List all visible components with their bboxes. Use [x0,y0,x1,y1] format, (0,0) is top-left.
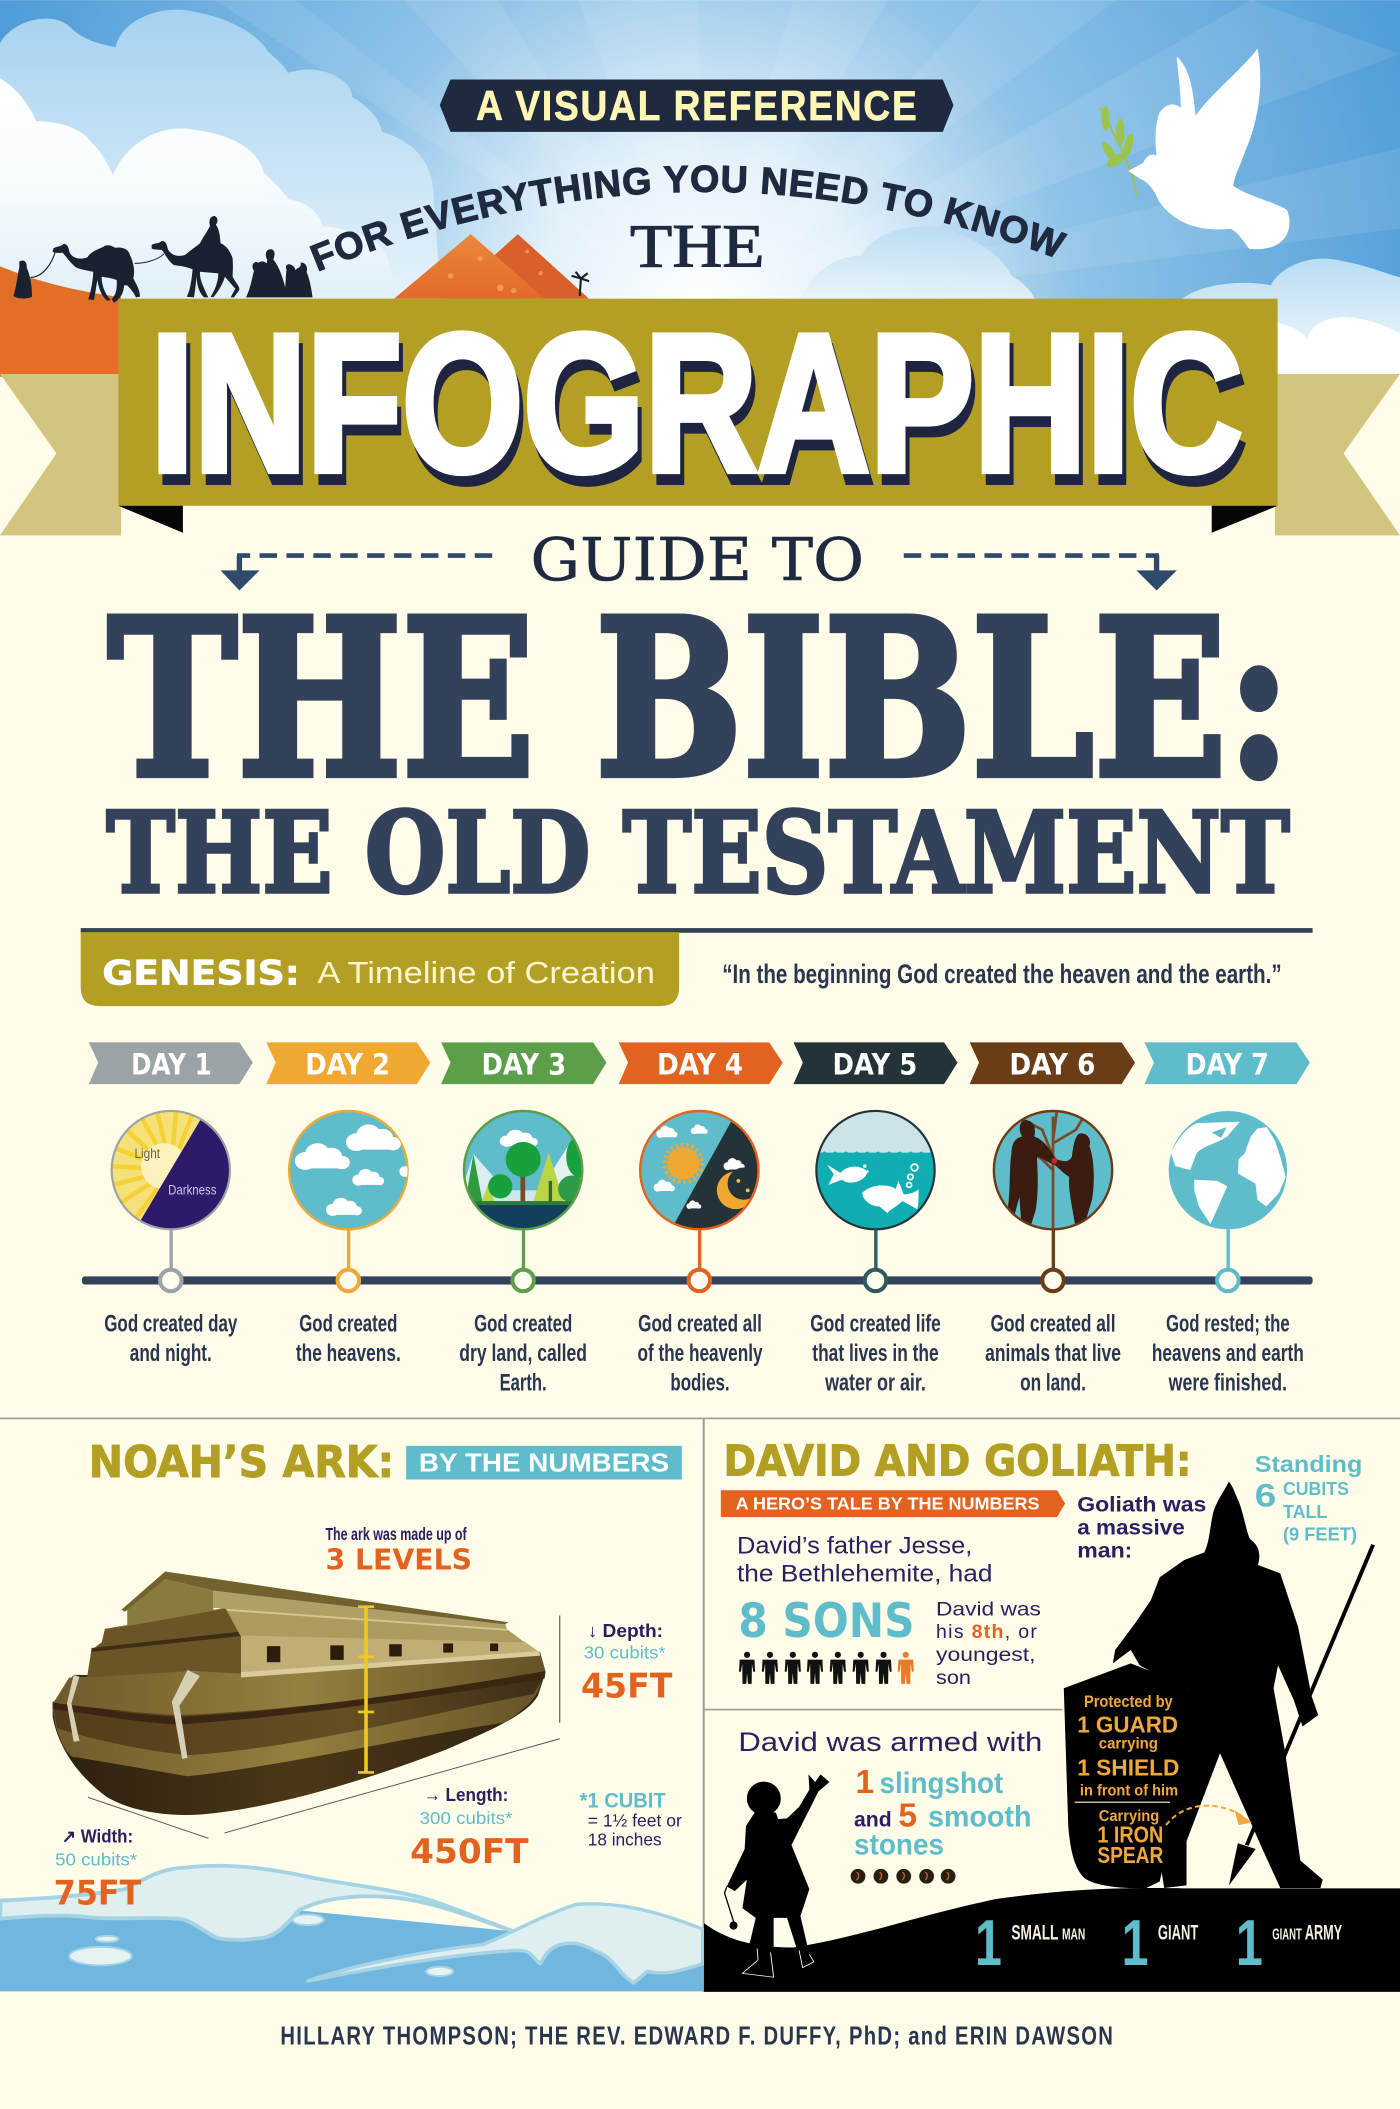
cubit note: = 1½ feet or [588,1810,682,1830]
goliath height [1255,1451,1362,1545]
shield text: 1 IRON [1097,1822,1163,1848]
shield text: in front of him [1080,1782,1178,1800]
cubit note: *1 CUBIT [580,1790,666,1813]
youngest son note: youngest, [936,1644,1036,1666]
weapons list: and [854,1807,892,1831]
caption: day 4 [637,1311,763,1397]
subtitle: guide to: GUIDE TO [531,525,864,594]
curved heading: FOR EVERYTHING YOU NEED TO KNOW [309,164,1068,272]
width measurement: 50 cubits* [55,1849,137,1869]
shield text: SPEAR [1097,1842,1164,1868]
goliath caption: a massive [1077,1517,1185,1540]
caption: day 1: and night. [130,1340,212,1367]
chevron: day 4 [619,1042,783,1084]
goliath height: Standing [1255,1451,1362,1477]
arrow: dashed right [904,556,1177,591]
jesse text [737,1532,993,1588]
caption: day 6: God created all [990,1311,1116,1338]
width measurement: ↗ Width: [62,1827,133,1847]
goliath height: 6 [1255,1477,1276,1513]
caption: day 1 [104,1311,238,1367]
shield text: 1 SHIELD [1077,1754,1179,1780]
weapons list [854,1764,1032,1862]
chevron: day 2 [266,1042,430,1084]
chevron: day 3 [441,1042,607,1084]
tally: small man giant army: 1 [1236,1907,1263,1979]
caption: day 5: that lives in the [812,1340,939,1367]
caption: day 3: dry land, called [459,1340,587,1367]
day 5 column [793,1042,958,1397]
levels callout: 3 LEVELS [325,1544,472,1577]
authors: HILLARY THOMPSON; THE REV. EDWARD F. DUFFY, PhD; and ERIN DAWSON [280,2022,1114,2050]
illustration: sun moon and stars [640,1111,767,1232]
levels callout: The ark was made up of [325,1524,467,1544]
illustration: man and woman at tree [994,1110,1112,1235]
title word: the: THE [630,212,765,280]
goliath height: CUBITS [1283,1479,1349,1499]
orange desert hill [0,266,121,377]
caption: day 7: God rested; the [1166,1311,1290,1338]
illustration: flood waves [0,1866,703,1991]
youngest son note: his 8th, or [936,1621,1037,1643]
illustration: heavens [289,1111,410,1229]
silhouette: david [725,1774,829,1977]
armed text: David was armed with [738,1727,1042,1757]
chevron: day 2: DAY 2 [305,1048,390,1082]
youngest son note [936,1598,1041,1689]
jesse text: David’s father Jesse, [737,1532,972,1559]
goliath height: TALL [1283,1502,1327,1522]
hero's tale banner: A HERO’S TALE BY THE NUMBERS [736,1494,1040,1514]
caption: day 3: Earth. [500,1370,547,1397]
day 3 column [441,1042,607,1397]
caption: day 3: God created [474,1311,572,1338]
day 4 column [619,1042,783,1397]
illustration: fish in water [814,1111,943,1233]
levels callout [325,1524,472,1577]
hero's tale banner [721,1490,1065,1517]
illustration: light and darkness: Darkness [168,1182,217,1197]
tally: small man giant army: SMALL MAN [1011,1920,1085,1944]
main gold ribbon [118,299,1278,506]
goliath height: (9 FEET) [1283,1525,1357,1545]
length measurement: 300 cubits* [420,1808,513,1828]
caravan silhouettes [13,216,313,303]
illustration: light and darkness [110,1110,231,1230]
weapons list: 5 [898,1797,917,1834]
caption: day 7 [1152,1311,1304,1397]
caption: day 2: the heavens. [296,1340,401,1367]
length measurement [410,1785,529,1871]
tally: small man giant army: 1 [975,1907,1002,1979]
chevron: day 6 [970,1042,1135,1084]
goliath caption [1077,1494,1206,1562]
chevron: day 5: DAY 5 [832,1048,917,1082]
chevron: day 7 [1144,1042,1310,1084]
caption: day 4: bodies. [670,1370,730,1397]
genesis heading tab: GENESIS: [102,954,300,993]
tally: small man giant army: 1 [1122,1907,1149,1979]
day 1 column [89,1042,253,1367]
clouds right [793,227,1400,377]
caption: day 1: God created day [104,1311,238,1338]
caption: day 6: on land. [1020,1370,1086,1397]
youngest son note: David was [936,1598,1041,1620]
caption: day 4: of the heavenly [637,1340,763,1367]
rule [81,928,1313,933]
depth measurement: 30 cubits* [584,1642,666,1662]
ribbon tails [0,374,1400,535]
caption: day 4: God created all [638,1311,762,1338]
caption: day 6: animals that live [985,1340,1121,1367]
depth measurement [581,1621,673,1705]
caption: day 2: God created [299,1311,397,1338]
weapons list: smooth [928,1800,1032,1833]
arrow: dashed left [221,556,492,591]
caption: day 2 [296,1311,401,1367]
noah heading: NOAH’S ARK: [89,1437,394,1488]
caption: day 7: heavens and earth [1152,1340,1304,1367]
caption: day 5: God created life [810,1311,941,1338]
goliath caption: man: [1077,1539,1132,1562]
depth measurement: ↓ Depth: [588,1621,663,1641]
chevron: day 1: DAY 1 [131,1048,212,1082]
icon row: five stones [851,1869,956,1884]
caption: day 3 [459,1311,587,1397]
chevron: day 4: DAY 4 [657,1048,743,1082]
chevron: day 1 [89,1042,253,1084]
8 sons: 8 SONS [738,1594,915,1649]
pyramids [394,234,589,299]
illustration: light and darkness: Light [134,1146,160,1161]
chevron: day 5 [793,1042,958,1084]
shield text: Protected by [1084,1692,1173,1711]
chevron: day 3: DAY 3 [481,1048,566,1082]
cubit note [580,1790,682,1849]
depth measurement: 45FT [581,1666,673,1705]
youngest son note: son [936,1667,971,1689]
by the numbers tag: BY THE NUMBERS [419,1449,669,1477]
caption: day 6 [985,1311,1121,1397]
goliath caption: Goliath was [1077,1494,1206,1517]
shield text: Carrying [1099,1807,1159,1825]
caption: day 5: water or air. [824,1370,926,1397]
ground [704,1888,1400,1992]
length measurement: → Length: [424,1785,508,1805]
icon: dove with olive branch [1099,49,1289,249]
tally: small man giant army: GIANT ARMY [1272,1920,1342,1944]
ribbon folds [118,506,1278,533]
caption: day 7: were finished. [1168,1370,1287,1397]
by the numbers tag [406,1446,682,1479]
timeline bar with nodes [82,1270,1313,1291]
day 7 column [1144,1042,1310,1397]
illustration: dry land and trees [462,1110,584,1230]
cubit note: 18 inches [588,1829,662,1849]
panel: david and goliath [703,1436,1400,1992]
banner: a visual reference: A VISUAL REFERENCE [476,82,919,129]
illustration: ark [53,1571,560,1838]
weapons list: slingshot [880,1767,1003,1800]
caption: day 5 [810,1311,941,1397]
tally: small man giant army [975,1907,1342,1979]
weapons list: 1 [855,1764,874,1801]
silhouette: goliath [1064,1482,1373,1888]
chevron: day 7: DAY 7 [1185,1048,1269,1082]
genesis heading tab: A Timeline of Creation [317,955,655,990]
sky with sun rays [0,0,1400,377]
width measurement: 75FT [54,1873,141,1912]
shield text: carrying [1099,1735,1158,1752]
day 2 column [266,1042,430,1367]
arrow: to iron spear [1166,1806,1252,1825]
illustration: globe [1169,1111,1287,1229]
chevron: day 6: DAY 6 [1009,1048,1095,1082]
jesse text: the Bethlehemite, had [737,1561,993,1588]
length measurement: 450FT [410,1832,529,1871]
panel: noah's ark [0,1437,703,1991]
tally: small man giant army: GIANT [1158,1920,1198,1944]
clouds left [0,10,444,336]
shield text: 1 GUARD [1077,1711,1178,1737]
shield text [1077,1692,1179,1868]
david heading: DAVID AND GOLIATH: [724,1436,1192,1486]
icon row: eight sons [739,1652,914,1684]
weapons list: stones [854,1829,944,1862]
genesis heading tab [81,932,679,1006]
width measurement [54,1827,141,1912]
day 6 column [970,1042,1135,1397]
